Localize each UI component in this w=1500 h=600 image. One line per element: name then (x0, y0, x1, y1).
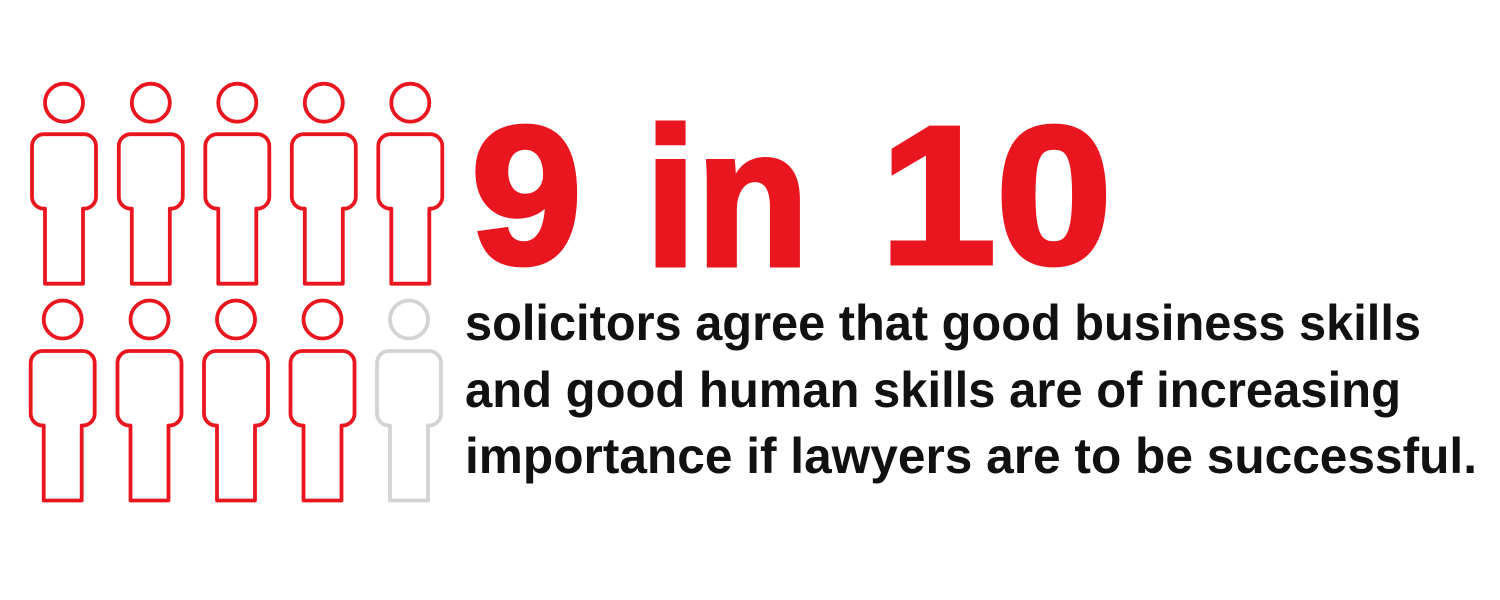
person 6 (31, 300, 95, 500)
person 7 (118, 300, 182, 500)
numeral 9: 9 (471, 86, 582, 305)
pictogram: 9 of 10 people highlighted (31, 84, 442, 500)
headline statistic (471, 86, 1112, 307)
person 3 (205, 84, 269, 284)
line 1: solicitors agree that good business skills (465, 295, 1421, 351)
person 1 (32, 84, 96, 284)
person 10: grey (377, 300, 441, 500)
person 2 (119, 84, 183, 284)
line 2: and good human skills are of increasing (465, 362, 1401, 418)
description text (465, 295, 1477, 484)
person 5 (378, 84, 442, 284)
person 8 (204, 300, 268, 500)
line 3: importance if lawyers are to be successful. (465, 428, 1477, 484)
person 9 (290, 300, 354, 500)
numeral 10: 10 (880, 86, 1112, 305)
word in: in (645, 88, 809, 307)
person 4 (292, 84, 356, 284)
